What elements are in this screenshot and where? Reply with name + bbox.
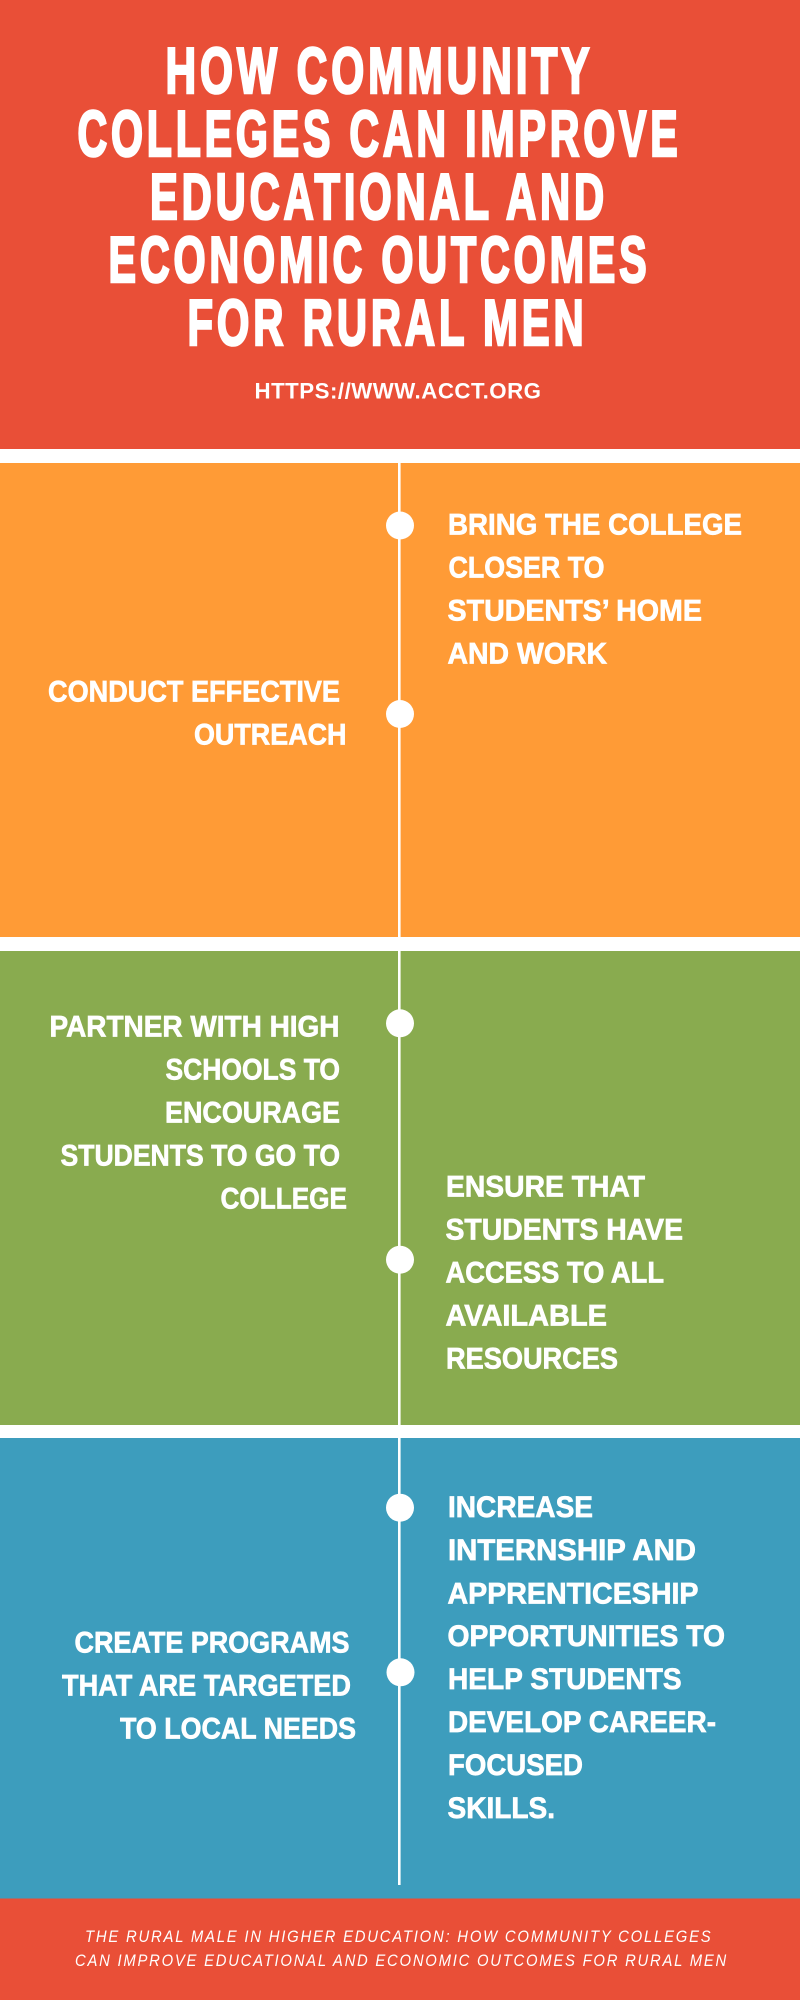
dot: blue top <box>386 1494 414 1522</box>
text: partner with high schools <box>50 1011 347 1215</box>
text: ensure access to resources: AVAILABLE <box>446 1300 607 1333</box>
text: conduct effective outreach: OUTREACH <box>194 718 346 751</box>
text: bring the college closer: CLOSER TO <box>448 552 604 585</box>
text: partner with high schools: PARTNER WITH HIGH <box>50 1011 340 1044</box>
panel: orange <box>0 463 800 937</box>
text: partner with high schools: SCHOOLS TO <box>166 1053 340 1086</box>
title: FOR RURAL MEN <box>188 286 588 359</box>
footer citation <box>75 1927 728 1970</box>
text: bring the college closer: STUDENTS’ HOME <box>448 595 702 628</box>
footer citation: THE RURAL MALE IN HIGHER EDUCATION: HOW COMMUNITY COLLEGES <box>85 1927 712 1946</box>
dot: blue bottom <box>386 1658 414 1686</box>
text: bring the college closer: AND WORK <box>448 638 607 671</box>
text: bring the college closer <box>448 509 742 671</box>
timeline line: green <box>398 951 401 1425</box>
timeline line: blue <box>398 1438 401 1885</box>
title <box>78 34 682 359</box>
panel: green <box>0 951 800 1425</box>
text: create targeted programs: CREATE PROGRAMS <box>74 1626 350 1659</box>
text: create targeted programs: TO LOCAL NEEDS <box>120 1712 356 1746</box>
text: increase internships: INTERNSHIP AND <box>448 1534 696 1567</box>
dot: green bottom <box>386 1246 414 1274</box>
text: increase internships: FOCUSED <box>448 1749 583 1782</box>
footer citation: CAN IMPROVE EDUCATIONAL AND ECONOMIC OUTCOMES FOR RURAL MEN <box>75 1951 728 1970</box>
panel: blue <box>0 1438 800 1899</box>
panel: footer <box>0 1898 800 2000</box>
text: increase internships: SKILLS. <box>448 1792 555 1825</box>
text: increase internships <box>448 1491 725 1825</box>
text: conduct effective outreach <box>48 675 346 751</box>
text: conduct effective outreach: CONDUCT EFFECTIVE <box>48 675 340 708</box>
text: increase internships: INCREASE <box>448 1491 593 1524</box>
dot: green top <box>386 1009 414 1037</box>
panel: header <box>0 0 800 449</box>
text: partner with high schools: STUDENTS TO GO TO <box>60 1139 340 1172</box>
text: increase internships: OPPORTUNITIES TO <box>448 1620 725 1653</box>
dot: orange bottom <box>386 700 414 728</box>
source url: HTTPS://WWW.ACCT.ORG <box>254 379 542 404</box>
text: ensure access to resources: ACCESS TO ALL <box>446 1257 664 1290</box>
text: create targeted programs: THAT ARE TARGETED <box>62 1670 351 1703</box>
text: create targeted programs <box>62 1626 356 1746</box>
text: partner with high schools: ENCOURAGE <box>165 1096 340 1129</box>
text: bring the college closer: BRING THE COLLEGE <box>448 509 742 542</box>
text: increase internships: APPRENTICESHIP <box>448 1578 698 1610</box>
timeline line: orange <box>398 463 401 937</box>
text: ensure access to resources: ENSURE THAT <box>446 1171 645 1204</box>
text: increase internships: HELP STUDENTS <box>448 1663 682 1696</box>
text: partner with high schools: COLLEGE <box>220 1182 347 1215</box>
text: ensure access to resources: STUDENTS HAVE <box>446 1214 683 1247</box>
dot: orange top <box>386 512 414 540</box>
text: ensure access to resources <box>446 1171 683 1376</box>
text: increase internships: DEVELOP CAREER- <box>448 1706 716 1739</box>
text: ensure access to resources: RESOURCES <box>446 1343 618 1376</box>
